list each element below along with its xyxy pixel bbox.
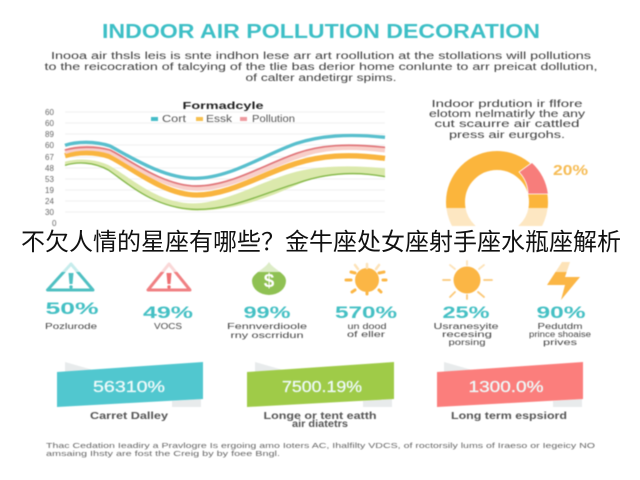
stat: Usranesyite: Usranesyite	[434, 322, 499, 331]
y axis labels	[45, 108, 57, 228]
icon: money drop: $	[264, 271, 275, 292]
footer note	[46, 441, 595, 458]
stat: Fennverdioole: 99%	[244, 303, 290, 322]
stat: Pozlurode	[45, 264, 98, 331]
card: Long term espsiord: 1300.0%	[468, 379, 544, 396]
stat: Usranesyite: 25%	[442, 303, 490, 322]
side note text: elotom nelmatirly the any	[429, 109, 585, 120]
card: Longe or tent eatth: air diatetrs	[292, 419, 348, 430]
y axis labels: 53	[45, 175, 54, 184]
card: Carret Dalley: 56310%	[93, 379, 165, 396]
footer note: amsaing Ihsty are fost the Creig by by foee Bngl.	[46, 449, 280, 458]
chart legend: Cort	[162, 114, 186, 125]
stat: un dood of eller: un dood	[348, 322, 386, 331]
value cards	[57, 362, 583, 430]
stat: Pedutdm: prince shoaise	[529, 330, 592, 339]
chart curves	[65, 135, 385, 211]
stat: VOCS	[143, 264, 193, 331]
donut chart	[456, 160, 588, 244]
stat: Fennverdioole	[227, 262, 308, 340]
stat: Pedutdm	[529, 262, 592, 347]
y axis labels: 24	[45, 197, 54, 206]
y axis labels: 60	[45, 108, 54, 117]
icon: warning triangle red	[148, 264, 190, 290]
chart legend: Essk	[206, 114, 233, 125]
card: Carret Dalley	[57, 362, 203, 422]
chart legend: Pollution	[252, 114, 295, 125]
icon: sun small	[346, 264, 386, 294]
card: Long term espsiord	[437, 362, 583, 422]
icon: sun large	[443, 261, 492, 299]
donut red segment	[519, 162, 548, 194]
stat: un dood of eller: of eller	[347, 330, 386, 339]
stat: Usranesyite: porsing	[448, 338, 486, 347]
stat: Usranesyite	[434, 261, 499, 347]
footer note: Thac Cedation Ieadiry a Pravlogre Is ergoing amo Ioters AC, Ihalfilty VDCS, of roctorsily lums of Iraeso or Iegeicy NO	[46, 441, 595, 450]
y axis labels: 19	[45, 186, 54, 195]
stat: Fennverdioole: rny oscrridun	[230, 331, 304, 340]
card: Longe or tent eatth	[247, 362, 394, 430]
y axis labels: 48	[45, 164, 54, 173]
overlay headline: 不欠人情的星座有哪些？金牛座处女座射手座水瓶座解析	[21, 229, 621, 256]
y axis labels: 67	[45, 153, 54, 162]
stat: un dood of eller: 570%	[335, 303, 397, 322]
y axis labels: 60	[45, 119, 54, 128]
side note text: cut scaurre air cattled	[434, 119, 580, 130]
stat: Pedutdm: Pedutdm	[538, 322, 583, 331]
side note text	[429, 99, 585, 141]
intro text: to the reicocration of talcying of the tlie bas derior home conlunte to arr preicat dollution,	[44, 62, 598, 73]
stat: Usranesyite: recesing	[442, 330, 492, 339]
stat: Pozlurode: Pozlurode	[45, 322, 98, 331]
card: Long term espsiord: Long term espsiord	[451, 411, 567, 422]
stat: un dood of eller	[335, 264, 397, 339]
stat: Pedutdm: 90%	[536, 303, 586, 322]
stat: VOCS: VOCS	[154, 322, 182, 331]
donut value: 20%	[553, 162, 588, 179]
stat: Pozlurode: 50%	[46, 299, 98, 318]
card: Carret Dalley: Carret Dalley	[90, 411, 169, 422]
line chart	[45, 101, 385, 228]
stat: VOCS: 49%	[143, 303, 193, 322]
card: Longe or tent eatth: 7500.19%	[282, 379, 362, 396]
side note text: press air eurgohs.	[449, 130, 565, 141]
intro text: Inooa air thsls leis is snte indhon lese arr art roollution at the stollations will pollutions	[51, 51, 591, 62]
icon: warning triangle teal	[48, 264, 93, 290]
y axis labels: 89	[45, 130, 54, 139]
stats row	[45, 261, 592, 347]
stat: Pedutdm: prives	[543, 338, 577, 347]
card: Longe or tent eatth: Longe or tent eatth	[264, 411, 376, 422]
chart legend	[151, 114, 295, 125]
chart title: Formadcyle	[182, 101, 264, 112]
intro text	[44, 51, 598, 84]
y axis labels: 60	[45, 141, 54, 150]
stat: Fennverdioole: Fennverdioole	[227, 322, 308, 331]
intro text: of calter andetirgr spims.	[246, 73, 396, 84]
title: INDOOR AIR POLLUTION DECORATION	[102, 21, 540, 43]
side note text: Indoor prdution ir flfore	[432, 99, 583, 110]
y axis labels: 0	[52, 219, 57, 228]
y axis labels: 30	[45, 208, 54, 217]
icon: lightning bolt	[547, 262, 580, 300]
